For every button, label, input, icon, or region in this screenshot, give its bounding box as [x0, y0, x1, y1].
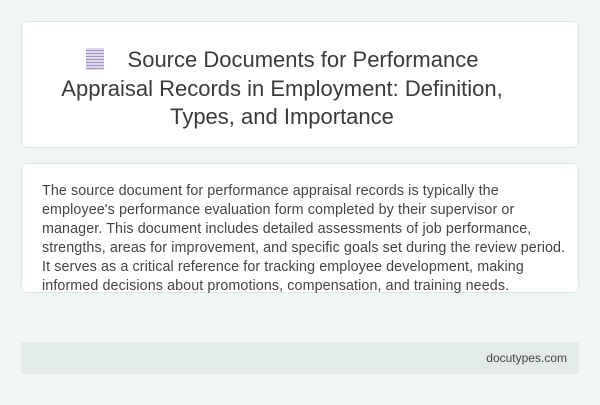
- description text: manager. This document includes detailed assessments of job performance,: [42, 221, 531, 237]
- footer bar: docutypes.com: [486, 351, 567, 365]
- title: Types, and Importance: [170, 104, 394, 129]
- footer bar: [21, 342, 579, 374]
- description text: [42, 183, 565, 294]
- title card: [21, 21, 579, 148]
- description text: It serves as a critical reference for tracking employee development, making: [42, 259, 524, 275]
- title: [61, 47, 503, 129]
- description text: informed decisions about promotions, compensation, and training needs.: [42, 278, 509, 294]
- description text: employee's performance evaluation form completed by their supervisor or: [42, 202, 514, 218]
- description text: The source document for performance appraisal records is typically the: [42, 183, 499, 199]
- title: Source Documents for Performance: [128, 47, 478, 72]
- title: Appraisal Records in Employment: Definition,: [61, 76, 503, 100]
- description text: strengths, areas for improvement, and specific goals set during the review period.: [42, 240, 565, 256]
- description card: [21, 163, 579, 293]
